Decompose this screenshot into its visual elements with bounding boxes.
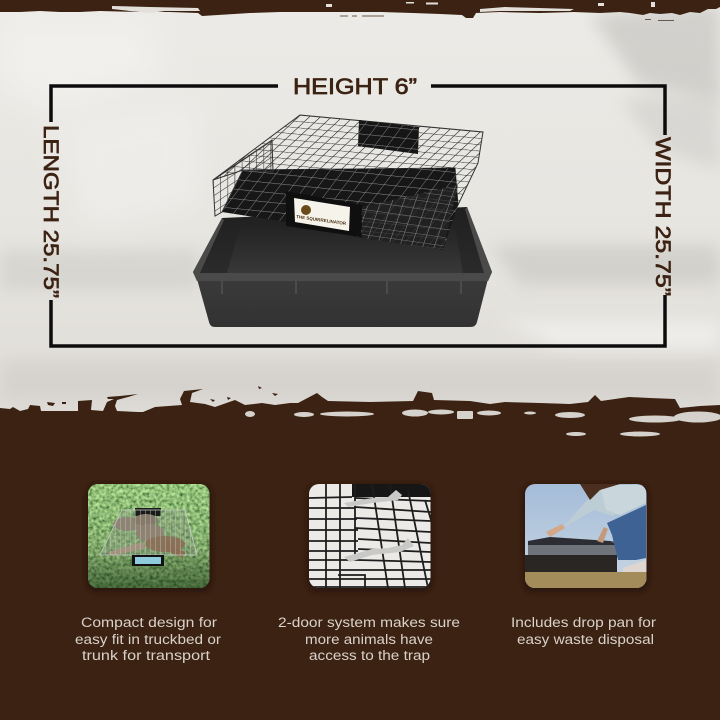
text block: 2-door system: more animals have [305,632,433,647]
text block: drop pan: Includes drop pan for [511,615,657,630]
text block: compact design: easy fit in truckbed or [75,632,222,647]
wire cage side wing [213,140,273,216]
wire cage top face [213,115,483,205]
feature image: person lifting trap off pan [525,484,647,588]
text block: drop pan: easy waste disposal [517,632,654,647]
text block: compact design [75,615,222,663]
drop pan tray [193,207,492,327]
label plate [286,191,362,237]
panel: torn brown section at bottom [0,386,720,720]
text block: compact design: trunk for transport [82,648,210,663]
feature image: two-door wire close-up [309,484,432,588]
text block: 2-door system: 2-door system makes sure [278,615,460,630]
label: width dimension: WIDTH 25.75” [651,137,675,296]
panel: torn brown band at top [0,0,720,21]
text block: compact design: Compact design for [81,615,218,630]
text block: 2-door system: access to the trap [309,648,430,663]
text block: 2-door system [278,615,460,663]
heading: height dimension: HEIGHT 6” [293,74,417,99]
product: wire trap on drop pan [193,115,492,327]
wire cage front dark panel [222,168,458,250]
dimension frame [51,86,665,346]
wire cage lower front wall [362,185,458,250]
door panel: rear black [358,120,419,154]
label plate: THE SQUIRRELINATOR [296,214,347,226]
panel: textured light background [0,0,720,430]
text block: drop pan [511,615,657,647]
feature image: squirrels in trap on grass [88,484,210,588]
label: length dimension: LENGTH 25.75” [39,125,63,298]
thumbnail shadows [86,484,649,592]
